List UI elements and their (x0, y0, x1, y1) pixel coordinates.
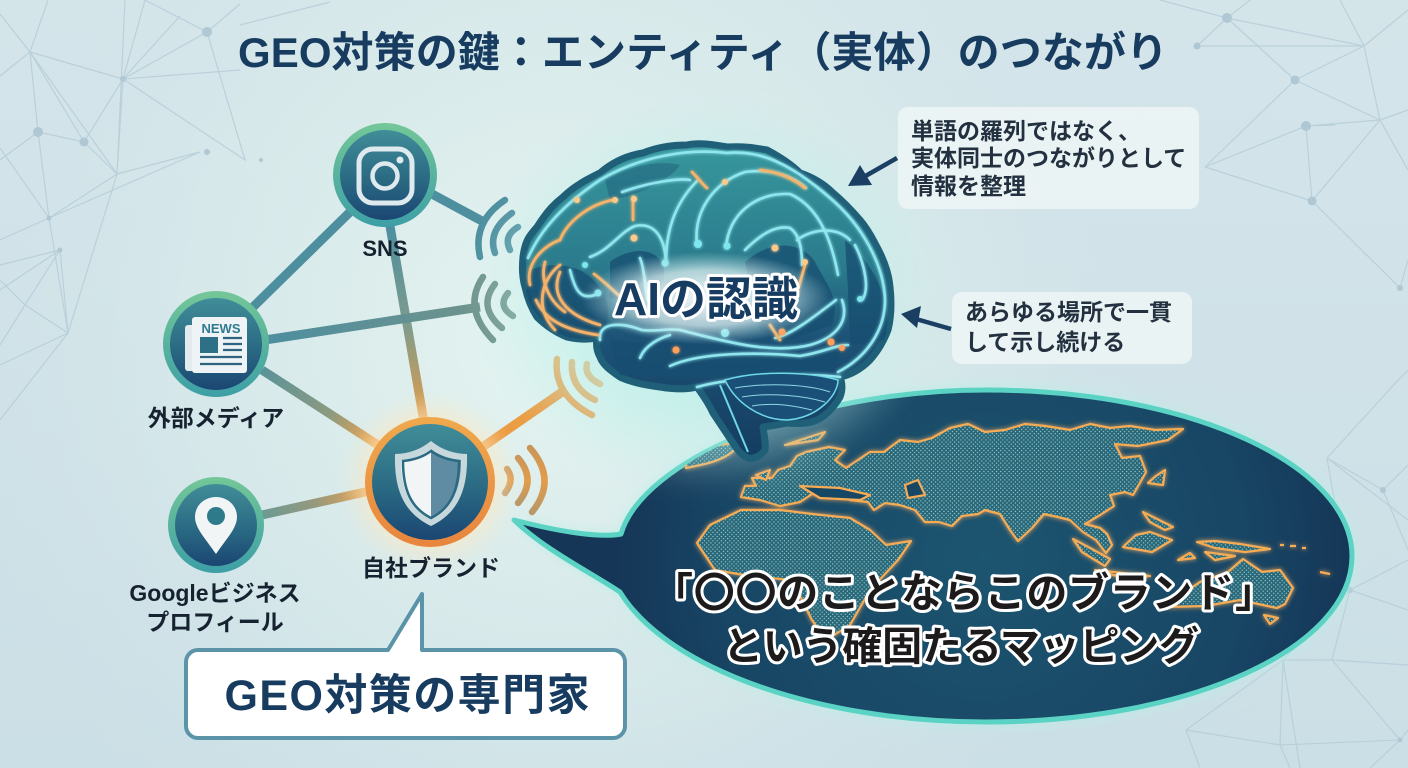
brain nodes (574, 179, 863, 354)
network connection lines (250, 194, 565, 515)
icon: signal waves from media (475, 277, 513, 340)
text box: consistent signal: して示し続ける (965, 329, 1125, 355)
node: external media (163, 291, 269, 397)
label: Google business profile: Googleビジネス (129, 580, 301, 606)
brain label: AIの認識 (614, 273, 798, 325)
brain outline (522, 144, 891, 458)
icon: newspaper: NEWS (202, 321, 241, 336)
node: Google business profile (168, 477, 264, 573)
map caption: 「〇〇のことならこのブランド」 (652, 570, 1276, 616)
arrow: to brain from second text box (901, 306, 951, 329)
label: own brand: 自社ブランド (362, 555, 500, 581)
text box: organise as entities: 単語の羅列ではなく、 (911, 118, 1141, 144)
icon: signal waves from brand to map (505, 448, 545, 512)
text box: organise as entities: 情報を整理 (911, 173, 1026, 199)
text box: organise as entities: 実体同士のつながりとして (911, 145, 1186, 171)
arrow: to brain from first text box (848, 158, 897, 186)
icon: shield (395, 441, 467, 526)
callout: GEO specialist (186, 594, 625, 738)
panel: map speech bubble (514, 371, 1371, 741)
label: SNS: SNS (362, 236, 408, 261)
text box: organise as entities (898, 107, 1199, 209)
icon: signal waves from brand to brain (557, 359, 600, 415)
brain sulci: orange (529, 170, 805, 340)
icon: instagram (359, 149, 412, 203)
text box: consistent signal (952, 292, 1192, 364)
label: external media: 外部メディア (148, 405, 284, 431)
title: GEO対策の鍵：エンティティ（実体）のつながり (238, 29, 1168, 76)
brain illustration (484, 134, 900, 488)
brain dark folds (525, 163, 887, 378)
icon: signal waves from SNS (478, 200, 518, 257)
map caption: という確固たるマッピング (723, 625, 1199, 669)
callout: GEO specialist: GEO対策の専門家 (224, 672, 590, 720)
node: SNS (333, 123, 437, 227)
brain label halo (581, 252, 831, 344)
cerebellum (720, 373, 838, 452)
map caption (652, 570, 1276, 669)
brain sulci: cyan (528, 152, 885, 387)
text box: consistent signal: あらゆる場所で一貫 (965, 299, 1172, 325)
node: own brand (342, 394, 518, 570)
icon: map pin (195, 497, 237, 554)
label: Google business profile: プロフィール (146, 609, 284, 635)
world map (686, 424, 1330, 640)
